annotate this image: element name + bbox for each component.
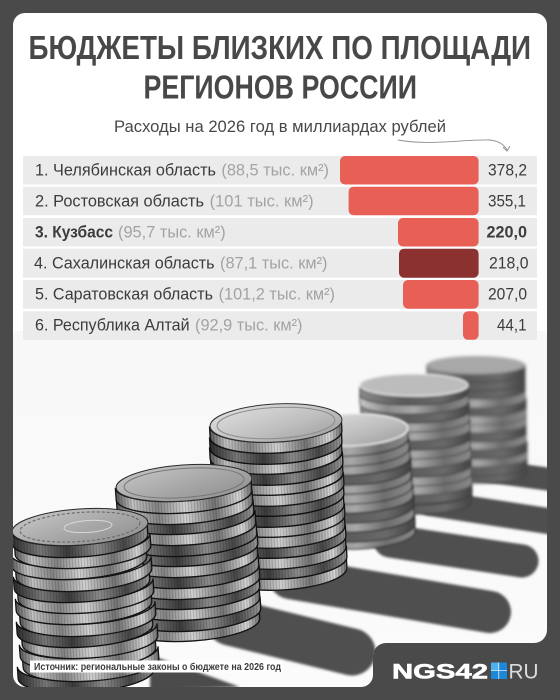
row 1 — [23, 156, 537, 184]
row 4: 218,0 — [489, 255, 528, 273]
row 2 — [23, 187, 537, 215]
logo: NGS42.RU — [392, 659, 538, 683]
row 1: 378,2 — [488, 161, 527, 179]
row 6: 6. Республика Алтай — [35, 317, 190, 335]
row 5: 5. Саратовская область — [35, 286, 213, 304]
coin stack 5 — [360, 374, 472, 515]
row 2: 2. Ростовская область — [35, 193, 204, 211]
row 6: (92,9 тыс. км²) — [195, 317, 302, 335]
subtitle: Расходы на 2026 год в миллиардах рублей — [114, 118, 446, 136]
coin stack 1 — [10, 504, 160, 697]
coin stack 4 — [340, 412, 418, 552]
row 1: 1. Челябинская область — [35, 161, 216, 179]
bar 207,0 — [403, 280, 479, 309]
title — [28, 29, 531, 106]
arrow to values column — [398, 140, 510, 151]
bar 220,0 — [398, 218, 479, 246]
chart: budget rows — [23, 156, 537, 340]
logo: NGS42.RU: RU — [508, 659, 538, 683]
logo: NGS42.RU: NGS42 — [392, 659, 488, 683]
bar 218,0 — [399, 249, 479, 278]
row 2: 355,1 — [488, 193, 526, 211]
white card — [13, 13, 547, 345]
row 4 — [23, 249, 537, 278]
row 5: 207,0 — [488, 286, 527, 304]
row 4: (87,1 тыс. км²) — [220, 255, 328, 273]
row 1: (88,5 тыс. км²) — [221, 161, 329, 179]
photo: coin stacks — [10, 331, 560, 697]
row 3: (95,7 тыс. км²) — [118, 224, 226, 242]
row 5 — [23, 280, 537, 309]
row 6: 44,1 — [497, 317, 526, 335]
bar 378,2 — [340, 156, 479, 184]
coin stack 2 — [115, 460, 262, 646]
coin stack 6 — [427, 356, 527, 483]
row 3: 220,0 — [486, 224, 527, 242]
bar 44,1 — [463, 311, 479, 340]
row 2: (101 тыс. км²) — [210, 193, 314, 211]
coin stack 3 — [209, 401, 348, 593]
row 4: 4. Сахалинская область — [34, 255, 215, 273]
row 5: (101,2 тыс. км²) — [219, 286, 335, 304]
bar 355,1 — [349, 187, 479, 215]
source note: Источник: региональные законы о бюджете на 2026 год — [34, 661, 281, 673]
row 6 — [23, 311, 537, 340]
row 3: 3. Кузбасс — [35, 224, 113, 242]
row 3 — [23, 218, 537, 246]
shadows of the stacks — [150, 470, 560, 690]
title: РЕГИОНОВ РОССИИ — [144, 68, 417, 106]
